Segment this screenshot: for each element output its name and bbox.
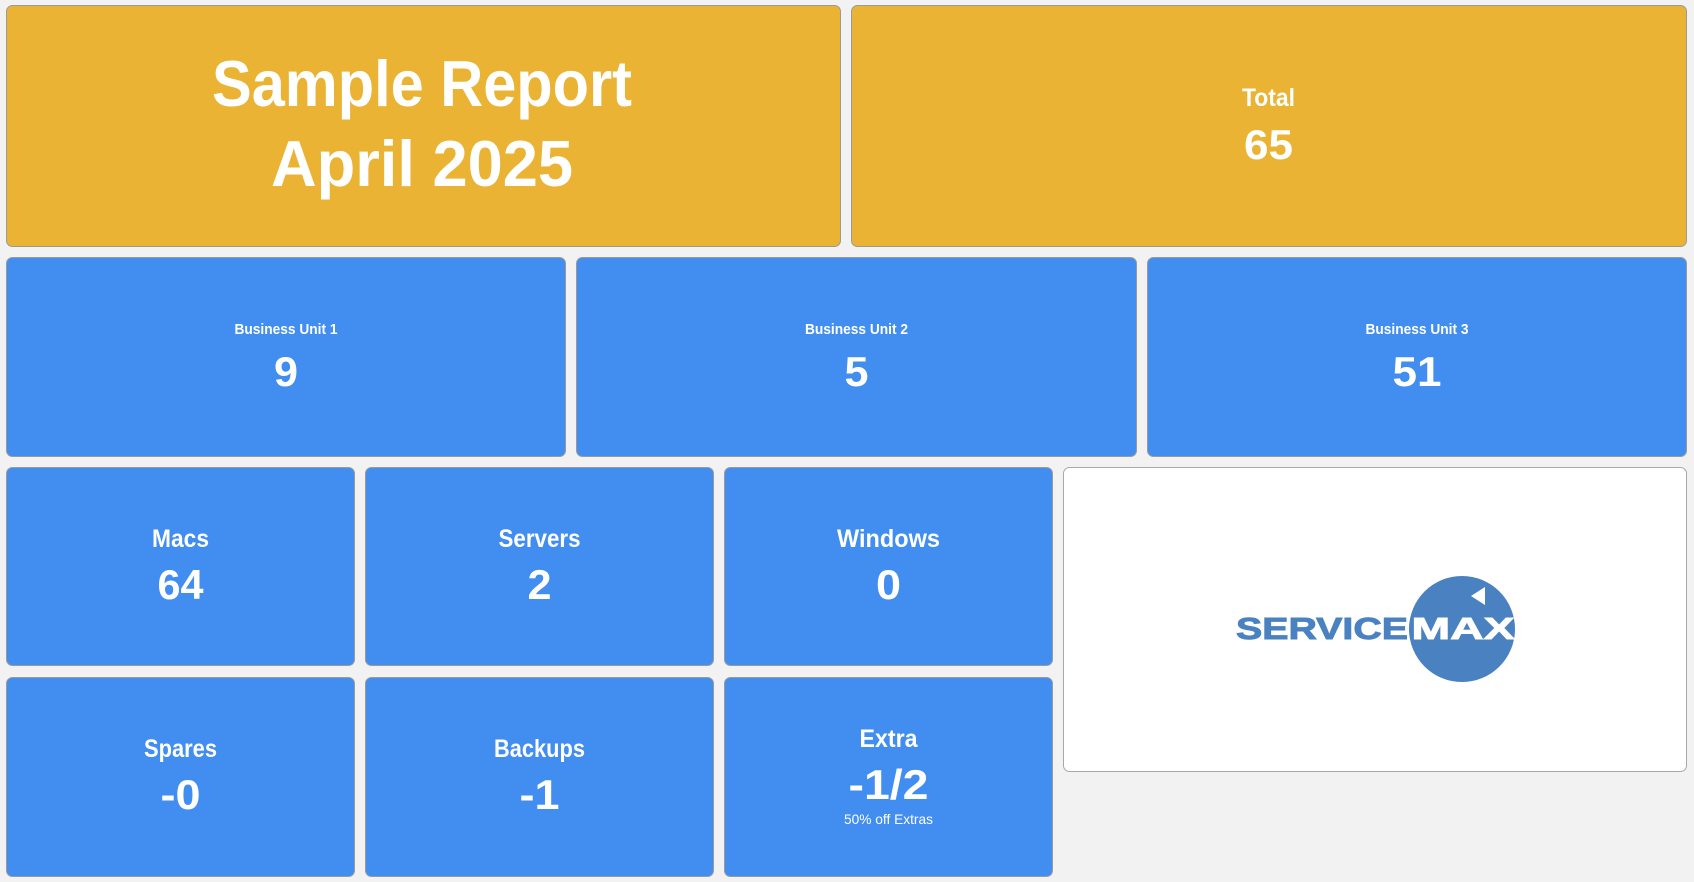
panel: extra: 50% off Extras (844, 811, 933, 827)
panel: extra (724, 678, 1052, 876)
panel: windows (724, 468, 1052, 666)
panel: backups: -1 (520, 771, 560, 818)
panel: windows: 0 (876, 561, 901, 608)
icon: servicemax logo: SERVICE (1236, 611, 1408, 646)
panel: extra: -1/2 (848, 761, 928, 808)
panel: business unit 2: Business Unit 2 (805, 321, 908, 338)
panel: servers: 2 (528, 561, 552, 608)
panel: total: Total (1242, 84, 1295, 112)
panel: business unit 1: Business Unit 1 (234, 321, 338, 338)
panel: macs: Macs (152, 525, 209, 553)
panel: total (852, 6, 1686, 246)
panel: business unit 2: 5 (844, 348, 868, 395)
panel: business unit 1 (6, 258, 566, 456)
heading: report title (212, 47, 632, 200)
panel: backups (366, 678, 714, 876)
panel: macs (6, 468, 354, 666)
panel: spares (6, 678, 354, 876)
panel: business unit 3: Business Unit 3 (1366, 321, 1468, 338)
heading: report title: Sample Report (212, 47, 632, 120)
panel: business unit 2 (576, 258, 1136, 456)
heading: report title: April 2025 (271, 127, 573, 200)
panel: business unit 3 (1148, 258, 1686, 456)
panel: servers: Servers (498, 525, 580, 553)
panel: macs: 64 (158, 561, 204, 608)
icon: servicemax logo: MAX (1412, 611, 1515, 646)
panel: business unit 3: 51 (1392, 348, 1442, 395)
icon: servicemax logo (1236, 576, 1515, 682)
panel: logo (1064, 468, 1686, 772)
panel: servers (366, 468, 714, 666)
panel: spares: Spares (144, 735, 217, 763)
panel: extra: Extra (860, 725, 919, 753)
panel: total: 65 (1244, 121, 1293, 168)
panel: backups: Backups (494, 735, 585, 763)
panel: title (6, 6, 840, 246)
panel: spares: -0 (160, 771, 200, 818)
panel: business unit 1: 9 (274, 348, 298, 395)
panel: windows: Windows (837, 525, 940, 553)
